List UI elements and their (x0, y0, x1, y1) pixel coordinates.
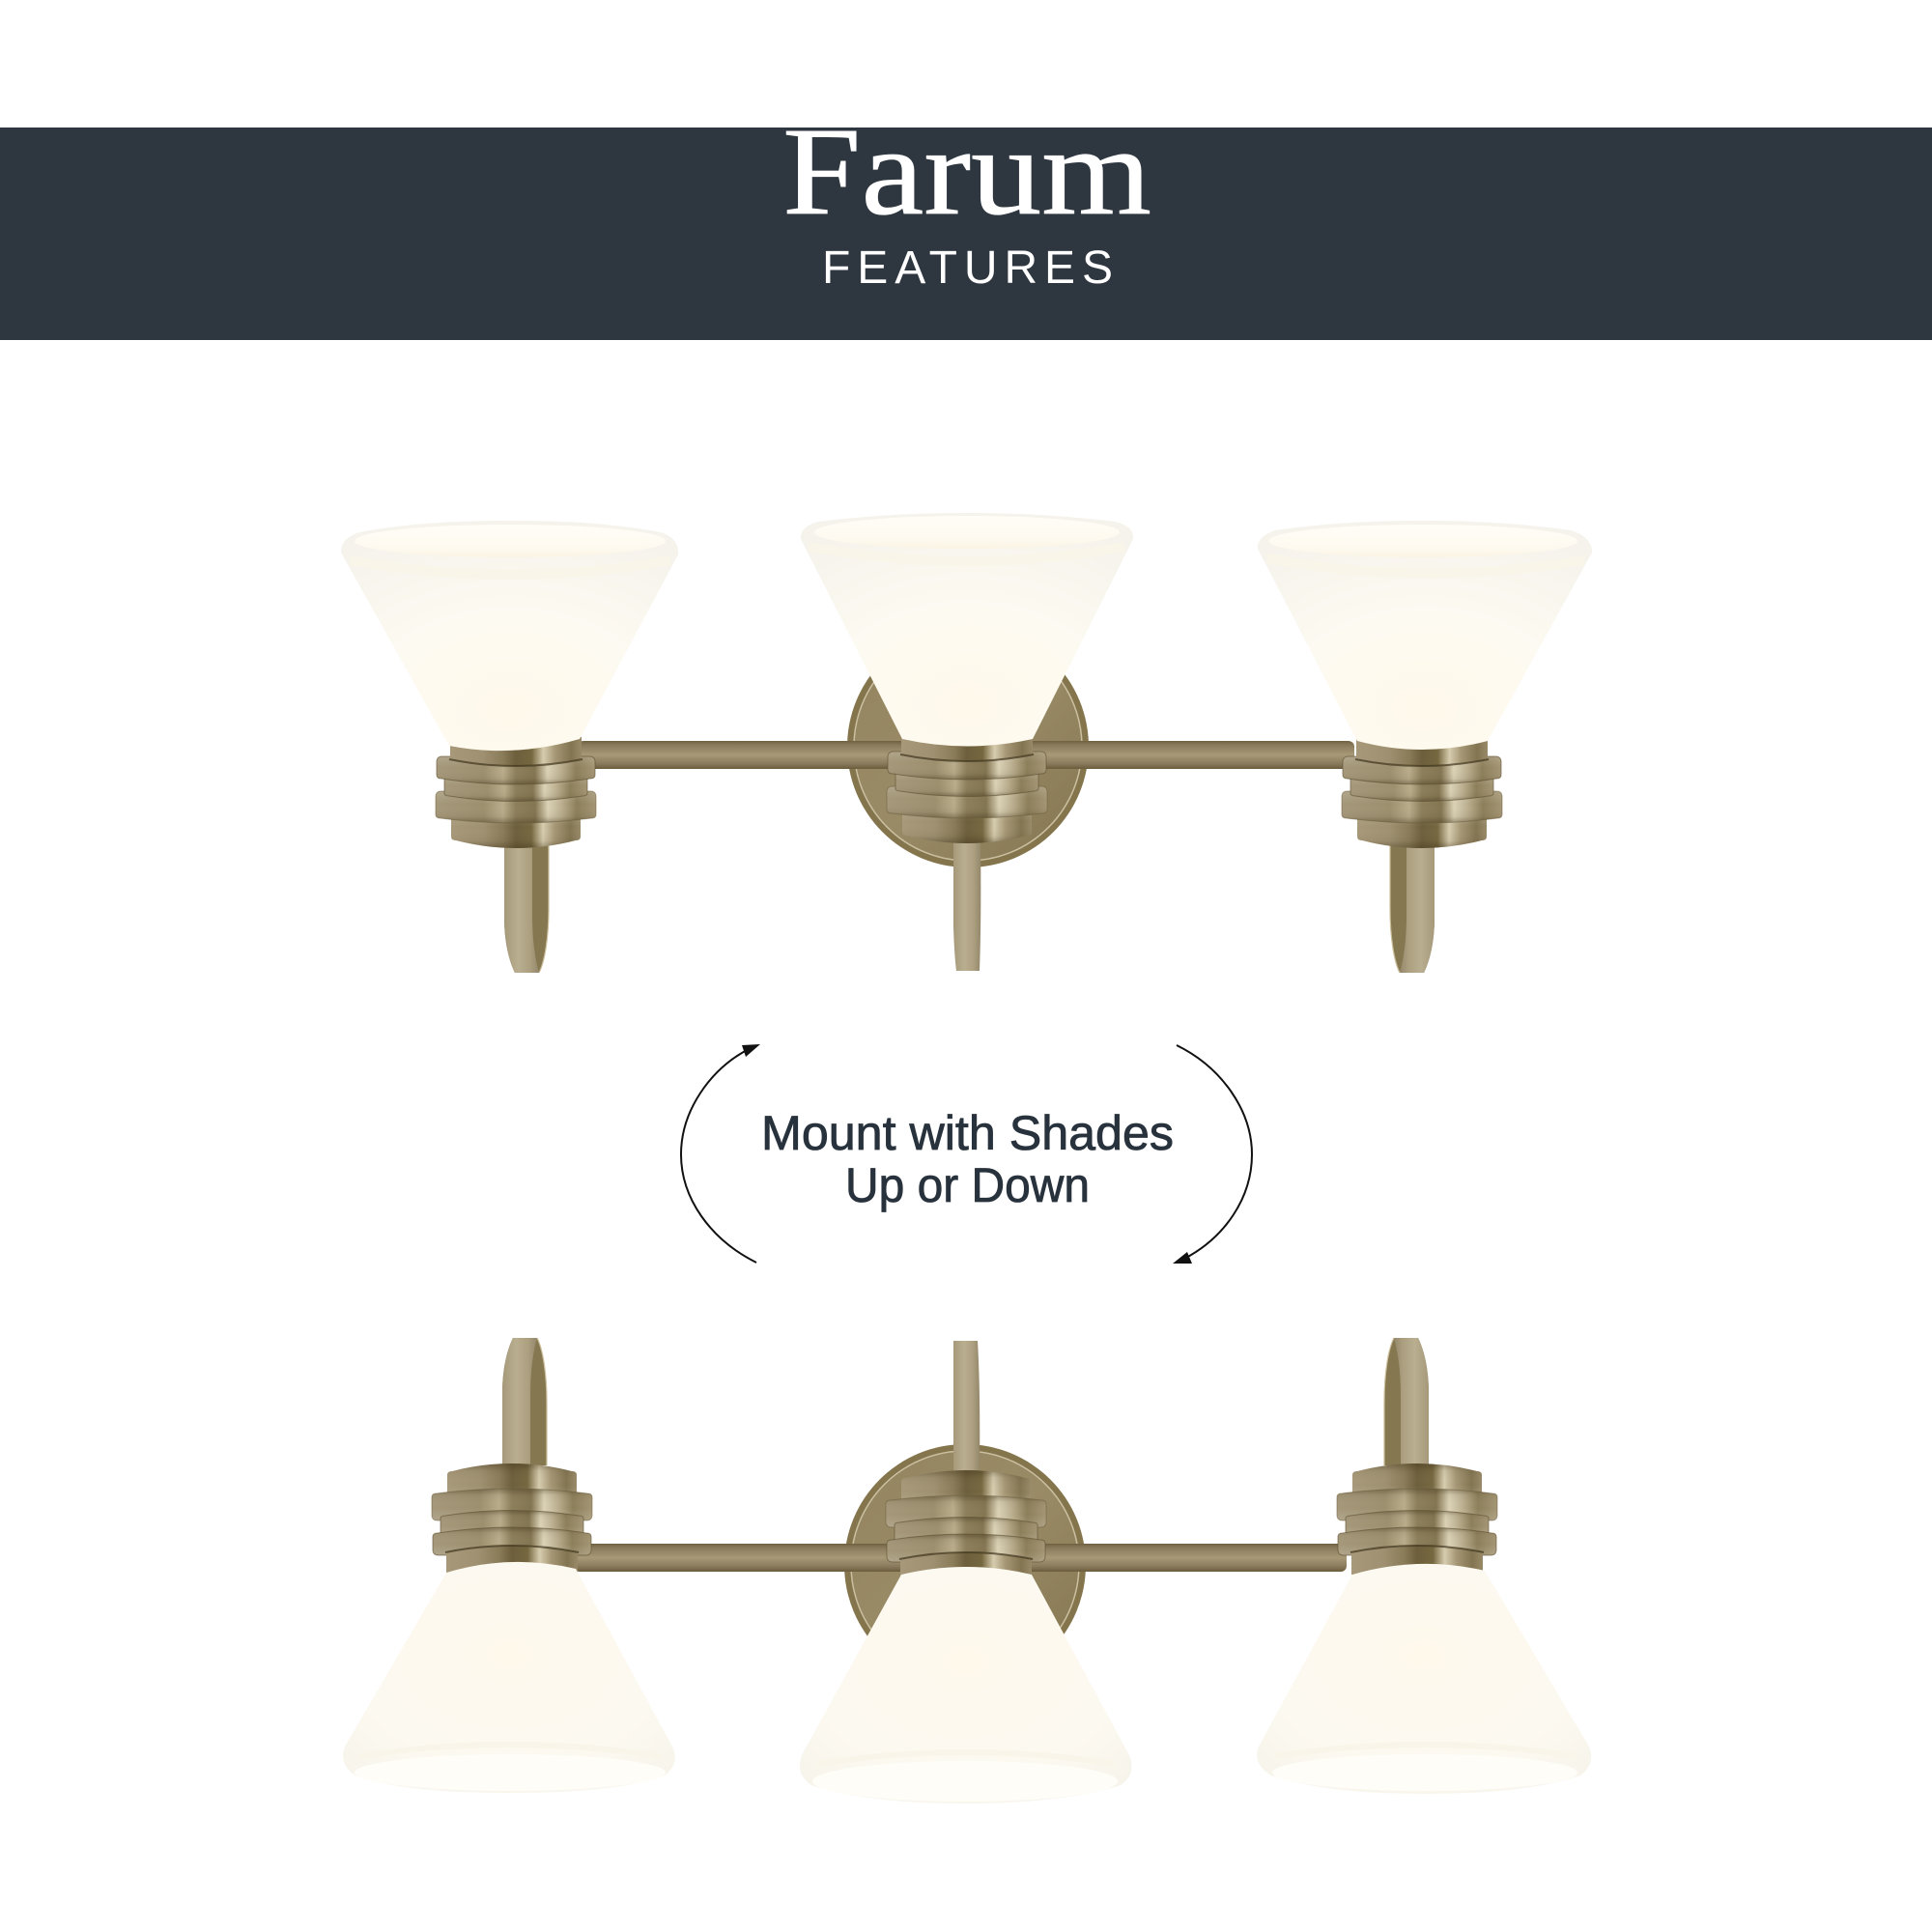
arrow: right arc pointing down (1173, 1045, 1252, 1264)
centre arm (953, 838, 980, 971)
right collar (1337, 1463, 1497, 1575)
left shade (341, 521, 678, 751)
right shade (1258, 521, 1592, 750)
backplate (844, 1444, 1086, 1686)
left arm (502, 1338, 547, 1465)
right arm (1384, 1338, 1429, 1465)
arrow: left arc pointing up (681, 1044, 760, 1263)
centre collar (886, 1470, 1046, 1581)
left arm (504, 845, 549, 973)
product: vanity light with shades down (343, 1338, 1591, 1804)
heading: Farum: Farum (782, 102, 1151, 242)
callout text: Up or Down (845, 1158, 1090, 1212)
backplate (847, 626, 1089, 867)
callout text (761, 1106, 1174, 1212)
right arm (1390, 845, 1435, 973)
connecting bar (578, 741, 1354, 769)
right collar (1342, 737, 1502, 848)
title banner (0, 102, 1932, 340)
rotation callout (681, 1044, 1252, 1264)
left collar (432, 1463, 592, 1575)
centre arm (953, 1341, 980, 1473)
subheading: FEATURES: FEATURES (822, 242, 1113, 294)
right shade (1257, 1564, 1591, 1794)
centre shade (801, 513, 1133, 746)
left shade (343, 1562, 675, 1793)
left collar (436, 737, 596, 848)
callout text: Mount with Shades (761, 1106, 1174, 1160)
centre shade (800, 1567, 1132, 1804)
centre collar (887, 732, 1047, 843)
product: vanity light with shades up (341, 513, 1592, 973)
connecting bar (574, 1544, 1347, 1572)
